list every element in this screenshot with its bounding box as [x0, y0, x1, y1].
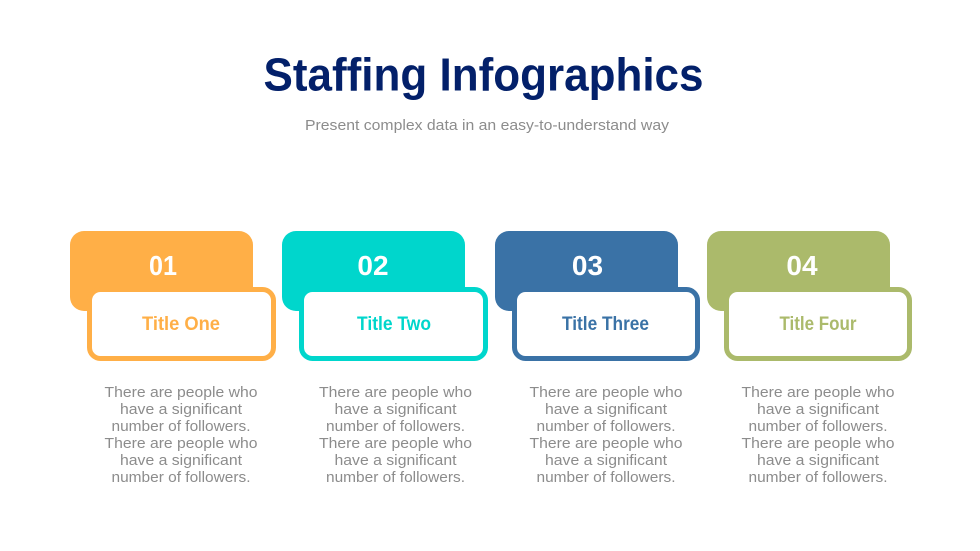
body text 04: There are people who — [742, 384, 894, 401]
title box: Title Three — [514, 290, 698, 358]
body text 01 — [104, 384, 258, 486]
body text 03: number of followers. — [536, 469, 676, 486]
body text 03: have a significant — [545, 452, 668, 469]
body text 02: There are people who — [319, 384, 472, 401]
body text 03 — [530, 384, 682, 486]
body text 04: have a significant — [757, 452, 880, 469]
body text 03: number of followers. — [536, 418, 676, 435]
number tab 04 — [707, 231, 890, 311]
title box: Title Four — [726, 290, 910, 358]
body text 02: There are people who — [319, 435, 472, 452]
number tab 02: 02 — [357, 250, 389, 281]
body text 01: There are people who — [104, 384, 258, 401]
title box: Title One: Title One — [142, 314, 220, 335]
title box: Title Two — [302, 290, 486, 358]
number tab 02 — [282, 231, 465, 311]
title box: Title One — [90, 290, 274, 358]
body text 04 — [742, 384, 894, 486]
title: Staffing Infographics — [264, 48, 704, 100]
panel: step 03 — [495, 231, 698, 486]
number tab 01 — [70, 231, 253, 311]
body text 01: There are people who — [104, 435, 258, 452]
body text 03: There are people who — [530, 384, 682, 401]
number tab 01: 01 — [149, 250, 177, 281]
body text 04: number of followers. — [748, 418, 888, 435]
panel: step 01 — [70, 231, 274, 486]
panel: step 02 — [282, 231, 486, 486]
number tab 03 — [495, 231, 678, 311]
body text 04: There are people who — [742, 435, 894, 452]
body text 02 — [319, 384, 472, 486]
body text 02: have a significant — [334, 452, 457, 469]
body text 02: have a significant — [334, 401, 457, 418]
panel: step 04 — [707, 231, 910, 486]
title box: Title Three: Title Three — [562, 314, 649, 335]
body text 04: have a significant — [757, 401, 880, 418]
subtitle: Present complex data in an easy-to-understand way — [305, 117, 670, 134]
body text 03: There are people who — [530, 435, 682, 452]
body text 04: number of followers. — [748, 469, 888, 486]
number tab 04: 04 — [786, 250, 818, 281]
body text 01: have a significant — [120, 401, 243, 418]
body text 02: number of followers. — [326, 418, 465, 435]
body text 01: have a significant — [120, 452, 243, 469]
body text 01: number of followers. — [112, 418, 251, 435]
title box: Title Two: Title Two — [357, 314, 431, 335]
number tab 03: 03 — [572, 250, 603, 281]
body text 02: number of followers. — [326, 469, 465, 486]
body text 01: number of followers. — [112, 469, 251, 486]
title box: Title Four: Title Four — [780, 314, 857, 335]
body text 03: have a significant — [545, 401, 668, 418]
